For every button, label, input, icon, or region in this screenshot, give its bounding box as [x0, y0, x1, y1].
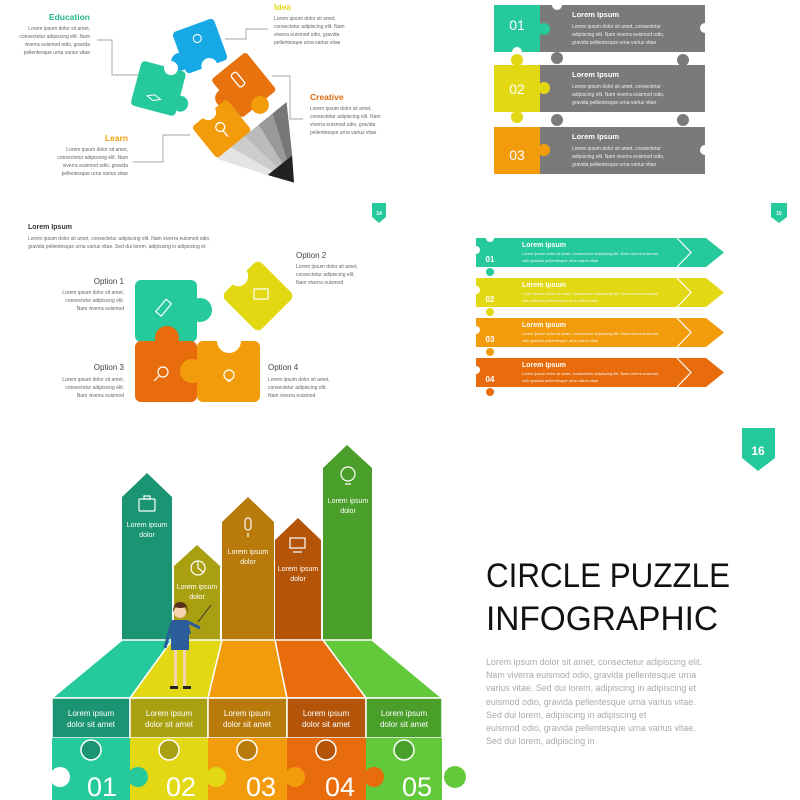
- heading: Idea: Idea: [274, 2, 291, 12]
- option labels: consectetur adipiscing elit.: [268, 385, 327, 391]
- panel: bar puzzle chart: dolor sit amet: [145, 720, 194, 729]
- arrow row 01: odio gravida pellentesque urna varius vitae: [522, 258, 599, 263]
- bar labels: [127, 498, 368, 601]
- title: [486, 557, 730, 638]
- arrow row 03: 03: [486, 335, 495, 344]
- bar labels: Lorem ipsum: [278, 566, 318, 573]
- heading: Idea: consectetur adipiscing elit. Nam: [274, 24, 345, 30]
- arrow row 02: 02: [486, 295, 495, 304]
- arrow row 03: [472, 318, 724, 356]
- heading: Learn: [57, 133, 128, 177]
- title: INFOGRAPHIC: [486, 600, 718, 638]
- arrow row 03: Lorem Ipsum: [522, 322, 566, 329]
- arrow row 04: Lorem Ipsum: [522, 362, 566, 369]
- bar labels: dolor: [340, 508, 356, 515]
- heading: Learn: pellentesque urna varius vitae: [62, 171, 128, 177]
- heading: Creative: Creative: [310, 92, 344, 102]
- heading: Education: Lorem ipsum dolor sit amet,: [28, 26, 90, 32]
- option labels: Option 2: [296, 251, 327, 260]
- heading block: Lorem Ipsum: [28, 224, 72, 231]
- heading: Creative: Lorem ipsum dolor sit amet,: [310, 106, 372, 112]
- panel: bar puzzle chart: [50, 445, 466, 800]
- description text: [486, 657, 702, 746]
- row 01: adipiscing elit. Nam viverra euismod odio,: [572, 32, 664, 38]
- panel: four options puzzle: [28, 203, 386, 402]
- heading: Creative: pellentesque urna varius vitae: [310, 130, 377, 136]
- row 03: Lorem Ipsum: [572, 132, 619, 141]
- row 03: adipiscing elit. Nam viverra euismod odio,: [572, 154, 664, 160]
- arrow row 01: 01: [486, 255, 495, 264]
- heading block: [28, 224, 211, 250]
- heading block: gravida pellentesque urna varius vitae. Sed dui lorem, adipiscing in adipiscing et: [28, 244, 206, 250]
- heading: Creative: [310, 92, 381, 136]
- heading: Idea: [274, 2, 345, 46]
- heading: Creative: consectetur adipiscing elit. Nam: [310, 114, 381, 120]
- label band: [52, 698, 442, 738]
- panel: pencil puzzle: [19, 2, 381, 211]
- description text: Lorem ipsum dolor sit amet, consectetur adipiscing elit.: [486, 657, 702, 667]
- heading: Education: Education: [49, 12, 90, 22]
- row 03: Lorem ipsum dolor sit amet, consectetur: [572, 146, 661, 152]
- option labels: consectetur adipiscing elit.: [65, 385, 124, 391]
- arrow row 03: odio gravida pellentesque urna varius vitae: [522, 338, 599, 343]
- arrow row 01: Lorem Ipsum: [522, 242, 566, 249]
- option labels: Option 4: [268, 363, 299, 372]
- piece: blue: [161, 18, 231, 85]
- arrow row 04: Lorem ipsum dolor sit amet, consectetur adipiscing elit. Nam viverra euismod: [522, 371, 658, 376]
- arrow row 02: odio gravida pellentesque urna varius vitae: [522, 298, 599, 303]
- arrow row 03: Lorem ipsum dolor sit amet, consectetur adipiscing elit. Nam viverra euismod: [522, 331, 658, 336]
- row 01: 01: [509, 17, 525, 33]
- puzzle pieces row: [50, 738, 466, 800]
- pencil body: [176, 52, 329, 211]
- heading: Education: pellentesque urna varius vitae: [24, 50, 90, 56]
- heading: Learn: viverra euismod odio, gravida: [63, 163, 128, 169]
- row 01: Lorem Ipsum: [572, 10, 619, 19]
- figure: presenter woman: [165, 602, 211, 689]
- arrow row 04: [472, 358, 724, 396]
- option labels: Option 1: [94, 277, 125, 286]
- row 02: adipiscing elit. Nam viverra euismod odio,: [572, 92, 664, 98]
- option labels: consectetur adipiscing elit.: [65, 298, 124, 304]
- heading: Creative: viverra euismod odio, gravida: [310, 122, 376, 128]
- option labels: Nam viverra euismod: [77, 393, 124, 399]
- icons: [154, 289, 268, 381]
- arrow row 02: Lorem ipsum dolor sit amet, consectetur adipiscing elit. Nam viverra euismod: [522, 291, 658, 296]
- panel: bar puzzle chart: dolor sit amet: [67, 720, 116, 729]
- option labels: Nam viverra euismod: [77, 306, 124, 312]
- badge 14: [372, 203, 386, 223]
- floor strips: [52, 640, 442, 698]
- piece: teal: [130, 54, 198, 119]
- panel: bar puzzle chart: dolor sit amet: [302, 720, 351, 729]
- row 03: gravida pellentesque urna varius vitae: [572, 162, 656, 168]
- title: CIRCLE PUZZLE: [486, 557, 730, 595]
- badge 15: 15: [776, 211, 782, 217]
- description text: euismod odio, gravida pellentesque urna varius vitae.: [486, 697, 696, 707]
- bar labels: Lorem ipsum: [328, 498, 368, 505]
- heading: Education: [19, 12, 90, 56]
- arrow row 04: odio gravida pellentesque urna varius vitae: [522, 378, 599, 383]
- description text: euismod odio, gravida pellentesque urna varius vitae.: [486, 723, 696, 733]
- heading: Education: consectetur adipiscing elit. Nam: [19, 34, 90, 40]
- option labels: consectetur adipiscing elit.: [296, 272, 355, 278]
- badge 16: [742, 428, 775, 471]
- heading: Idea: viverra euismod odio, gravida: [274, 32, 340, 38]
- heading: Learn: Learn: [105, 133, 128, 143]
- panel: bar puzzle chart: Lorem ipsum: [68, 709, 114, 718]
- arrow row 02: Lorem Ipsum: [522, 282, 566, 289]
- description text: Sed dui lorem, adipiscing in adipiscing et: [486, 710, 647, 720]
- panel: bar puzzle chart: dolor sit amet: [380, 720, 429, 729]
- option labels: Lorem ipsum dolor sit amet,: [296, 264, 358, 270]
- piece: option 3 orange: [135, 326, 197, 402]
- row 01: [494, 0, 710, 57]
- option labels: Lorem ipsum dolor sit amet,: [62, 290, 124, 296]
- piece: option 2 yellow: [213, 251, 295, 333]
- description text: varius vitae. Sed dui lorem, adipiscing in adipiscing et: [486, 683, 697, 693]
- row 01: gravida pellentesque urna varius vitae: [572, 40, 656, 46]
- bar labels: Lorem ipsum: [127, 522, 167, 529]
- arrow row 04: 04: [486, 375, 495, 384]
- row 02: [494, 52, 705, 123]
- bar labels: dolor: [139, 532, 155, 539]
- heading: Education: viverra euismod odio, gravida: [25, 42, 90, 48]
- heading: Idea: Lorem ipsum dolor sit amet,: [274, 16, 336, 22]
- piece: option 4 amber: [180, 329, 260, 402]
- badge 14: 14: [376, 211, 382, 217]
- option labels: Nam viverra euismod: [296, 280, 343, 286]
- option labels: Option 3: [94, 363, 125, 372]
- heading: Learn: consectetur adipiscing elit. Nam: [57, 155, 128, 161]
- row 01: Lorem ipsum dolor sit amet, consectetur: [572, 24, 661, 30]
- description text: Nam viverra euismod odio, gravida pellentesque urna: [486, 670, 696, 680]
- panel: bar puzzle chart: dolor sit amet: [223, 720, 272, 729]
- option labels: Nam viverra euismod: [268, 393, 315, 399]
- row 03: [494, 114, 710, 174]
- badge 15: [771, 203, 787, 223]
- option labels: Lorem ipsum dolor sit amet,: [268, 377, 330, 383]
- arrow row 01: [472, 234, 724, 276]
- bar arrows: [122, 445, 372, 640]
- icon: pencil: [230, 71, 246, 88]
- heading: Learn: Lorem ipsum dolor sit amet,: [66, 147, 128, 153]
- row 02: 02: [509, 81, 525, 97]
- connector lines: [97, 29, 303, 162]
- arrow row 02: [472, 278, 724, 316]
- heading block: Lorem ipsum dolor sit amet, consectetur adipiscing elit. Nam viverra euismod odio,: [28, 236, 211, 242]
- panel: bar puzzle chart: Lorem ipsum: [303, 709, 349, 718]
- row 02: Lorem ipsum dolor sit amet, consectetur: [572, 84, 661, 90]
- option labels: Lorem ipsum dolor sit amet,: [62, 377, 124, 383]
- row 03: 03: [509, 147, 525, 163]
- bar labels: Lorem ipsum: [177, 584, 217, 591]
- row 02: Lorem Ipsum: [572, 70, 619, 79]
- heading: Idea: pellentesque urna varius vitae: [274, 40, 341, 46]
- panel: bar puzzle chart: Lorem ipsum: [381, 709, 427, 718]
- bar icons: [139, 467, 355, 575]
- panel: bar puzzle chart: Lorem ipsum: [146, 709, 192, 718]
- bar labels: dolor: [240, 559, 256, 566]
- description text: Sed dui lorem, adipiscing in: [486, 736, 595, 746]
- panel: arrow rows: [472, 234, 724, 396]
- row 02: gravida pellentesque urna varius vitae: [572, 100, 656, 106]
- bar labels: dolor: [290, 576, 306, 583]
- bar labels: dolor: [189, 594, 205, 601]
- badge 16: 16: [751, 444, 765, 458]
- arrow row 01: Lorem ipsum dolor sit amet, consectetur adipiscing elit. Nam viverra euismod: [522, 251, 658, 256]
- panel: bar puzzle chart: Lorem ipsum: [224, 709, 270, 718]
- piece: option 1 teal: [135, 280, 212, 342]
- option labels: [62, 251, 358, 399]
- bar labels: Lorem ipsum: [228, 549, 268, 556]
- icon: magnifier: [214, 121, 227, 133]
- panel: numbered puzzle rows: [494, 0, 710, 174]
